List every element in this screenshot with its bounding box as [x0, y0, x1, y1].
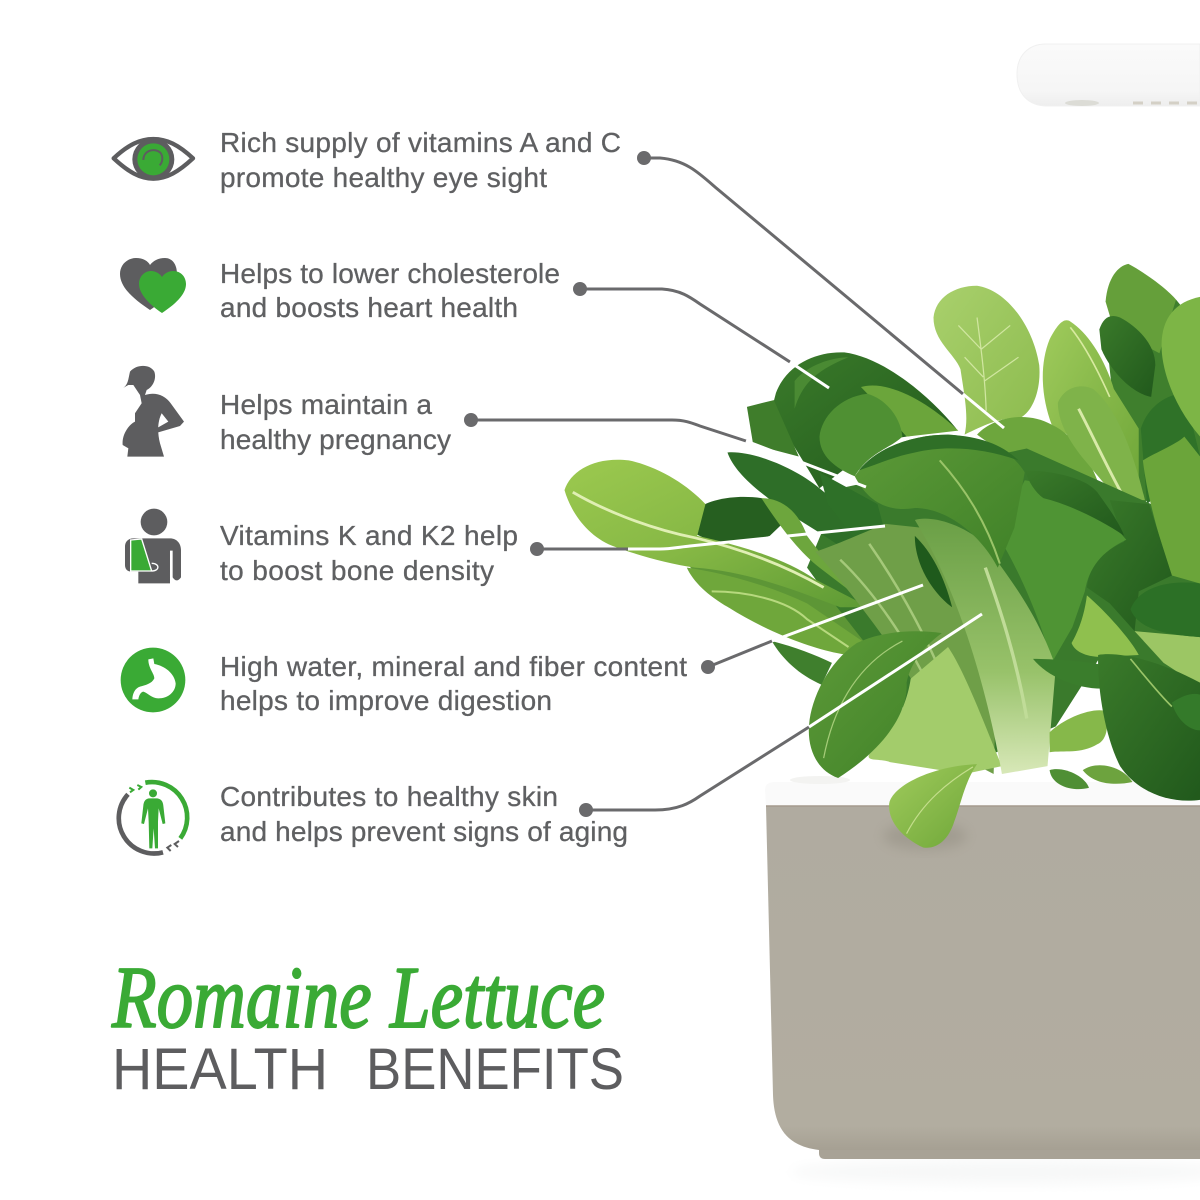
- text: digestion: helps to improve digestion: [220, 685, 552, 716]
- callout line: digestion: [701, 585, 923, 674]
- icon: body renewal cycle: [119, 782, 187, 853]
- callout line: bone density: [530, 526, 885, 556]
- icon: eye: [114, 138, 193, 180]
- lettuce plant: [565, 264, 1200, 848]
- text: heart health: and boosts heart health: [220, 292, 518, 323]
- text: digestion: High water, mineral and fiber content: [220, 651, 687, 682]
- text: bone density: to boost bone density: [220, 555, 494, 586]
- subtitle: health benefits: HEALTH: [112, 1037, 328, 1102]
- icon: pregnant woman: [123, 366, 184, 457]
- text: heart health: [220, 258, 560, 323]
- text: eye sight: [220, 127, 621, 193]
- icon: smart garden lamp: [1017, 44, 1200, 106]
- text: skin: and helps prevent signs of aging: [220, 816, 628, 847]
- text: bone density: [220, 520, 518, 586]
- callout line: heart health: [573, 282, 829, 388]
- callout line: eye sight: [637, 151, 1004, 428]
- text: pregnancy: Helps maintain a: [220, 389, 432, 420]
- subtitle: health benefits: [112, 1037, 624, 1102]
- planter pot: [765, 776, 1200, 1184]
- title: Romaine Lettuce: Romaine Lettuce: [111, 950, 605, 1047]
- icon: hearts: [120, 258, 186, 313]
- callout line: skin: [579, 614, 982, 817]
- subtitle: health benefits: BENEFITS: [366, 1037, 624, 1102]
- text: eye sight: promote healthy eye sight: [220, 162, 547, 193]
- text: digestion: [220, 651, 687, 716]
- text: skin: [220, 781, 628, 847]
- text: heart health: Helps to lower cholesterole: [220, 258, 560, 289]
- text: eye sight: Rich supply of vitamins A and C: [220, 127, 621, 158]
- icon: stomach: [121, 648, 185, 712]
- text: skin: Contributes to healthy skin: [220, 781, 558, 812]
- text: pregnancy: healthy pregnancy: [220, 424, 451, 455]
- text: bone density: Vitamins K and K2 help: [220, 520, 518, 551]
- icon: person with arm sling: [125, 509, 181, 583]
- text: pregnancy: [220, 389, 451, 455]
- callout line: pregnancy: [464, 413, 866, 487]
